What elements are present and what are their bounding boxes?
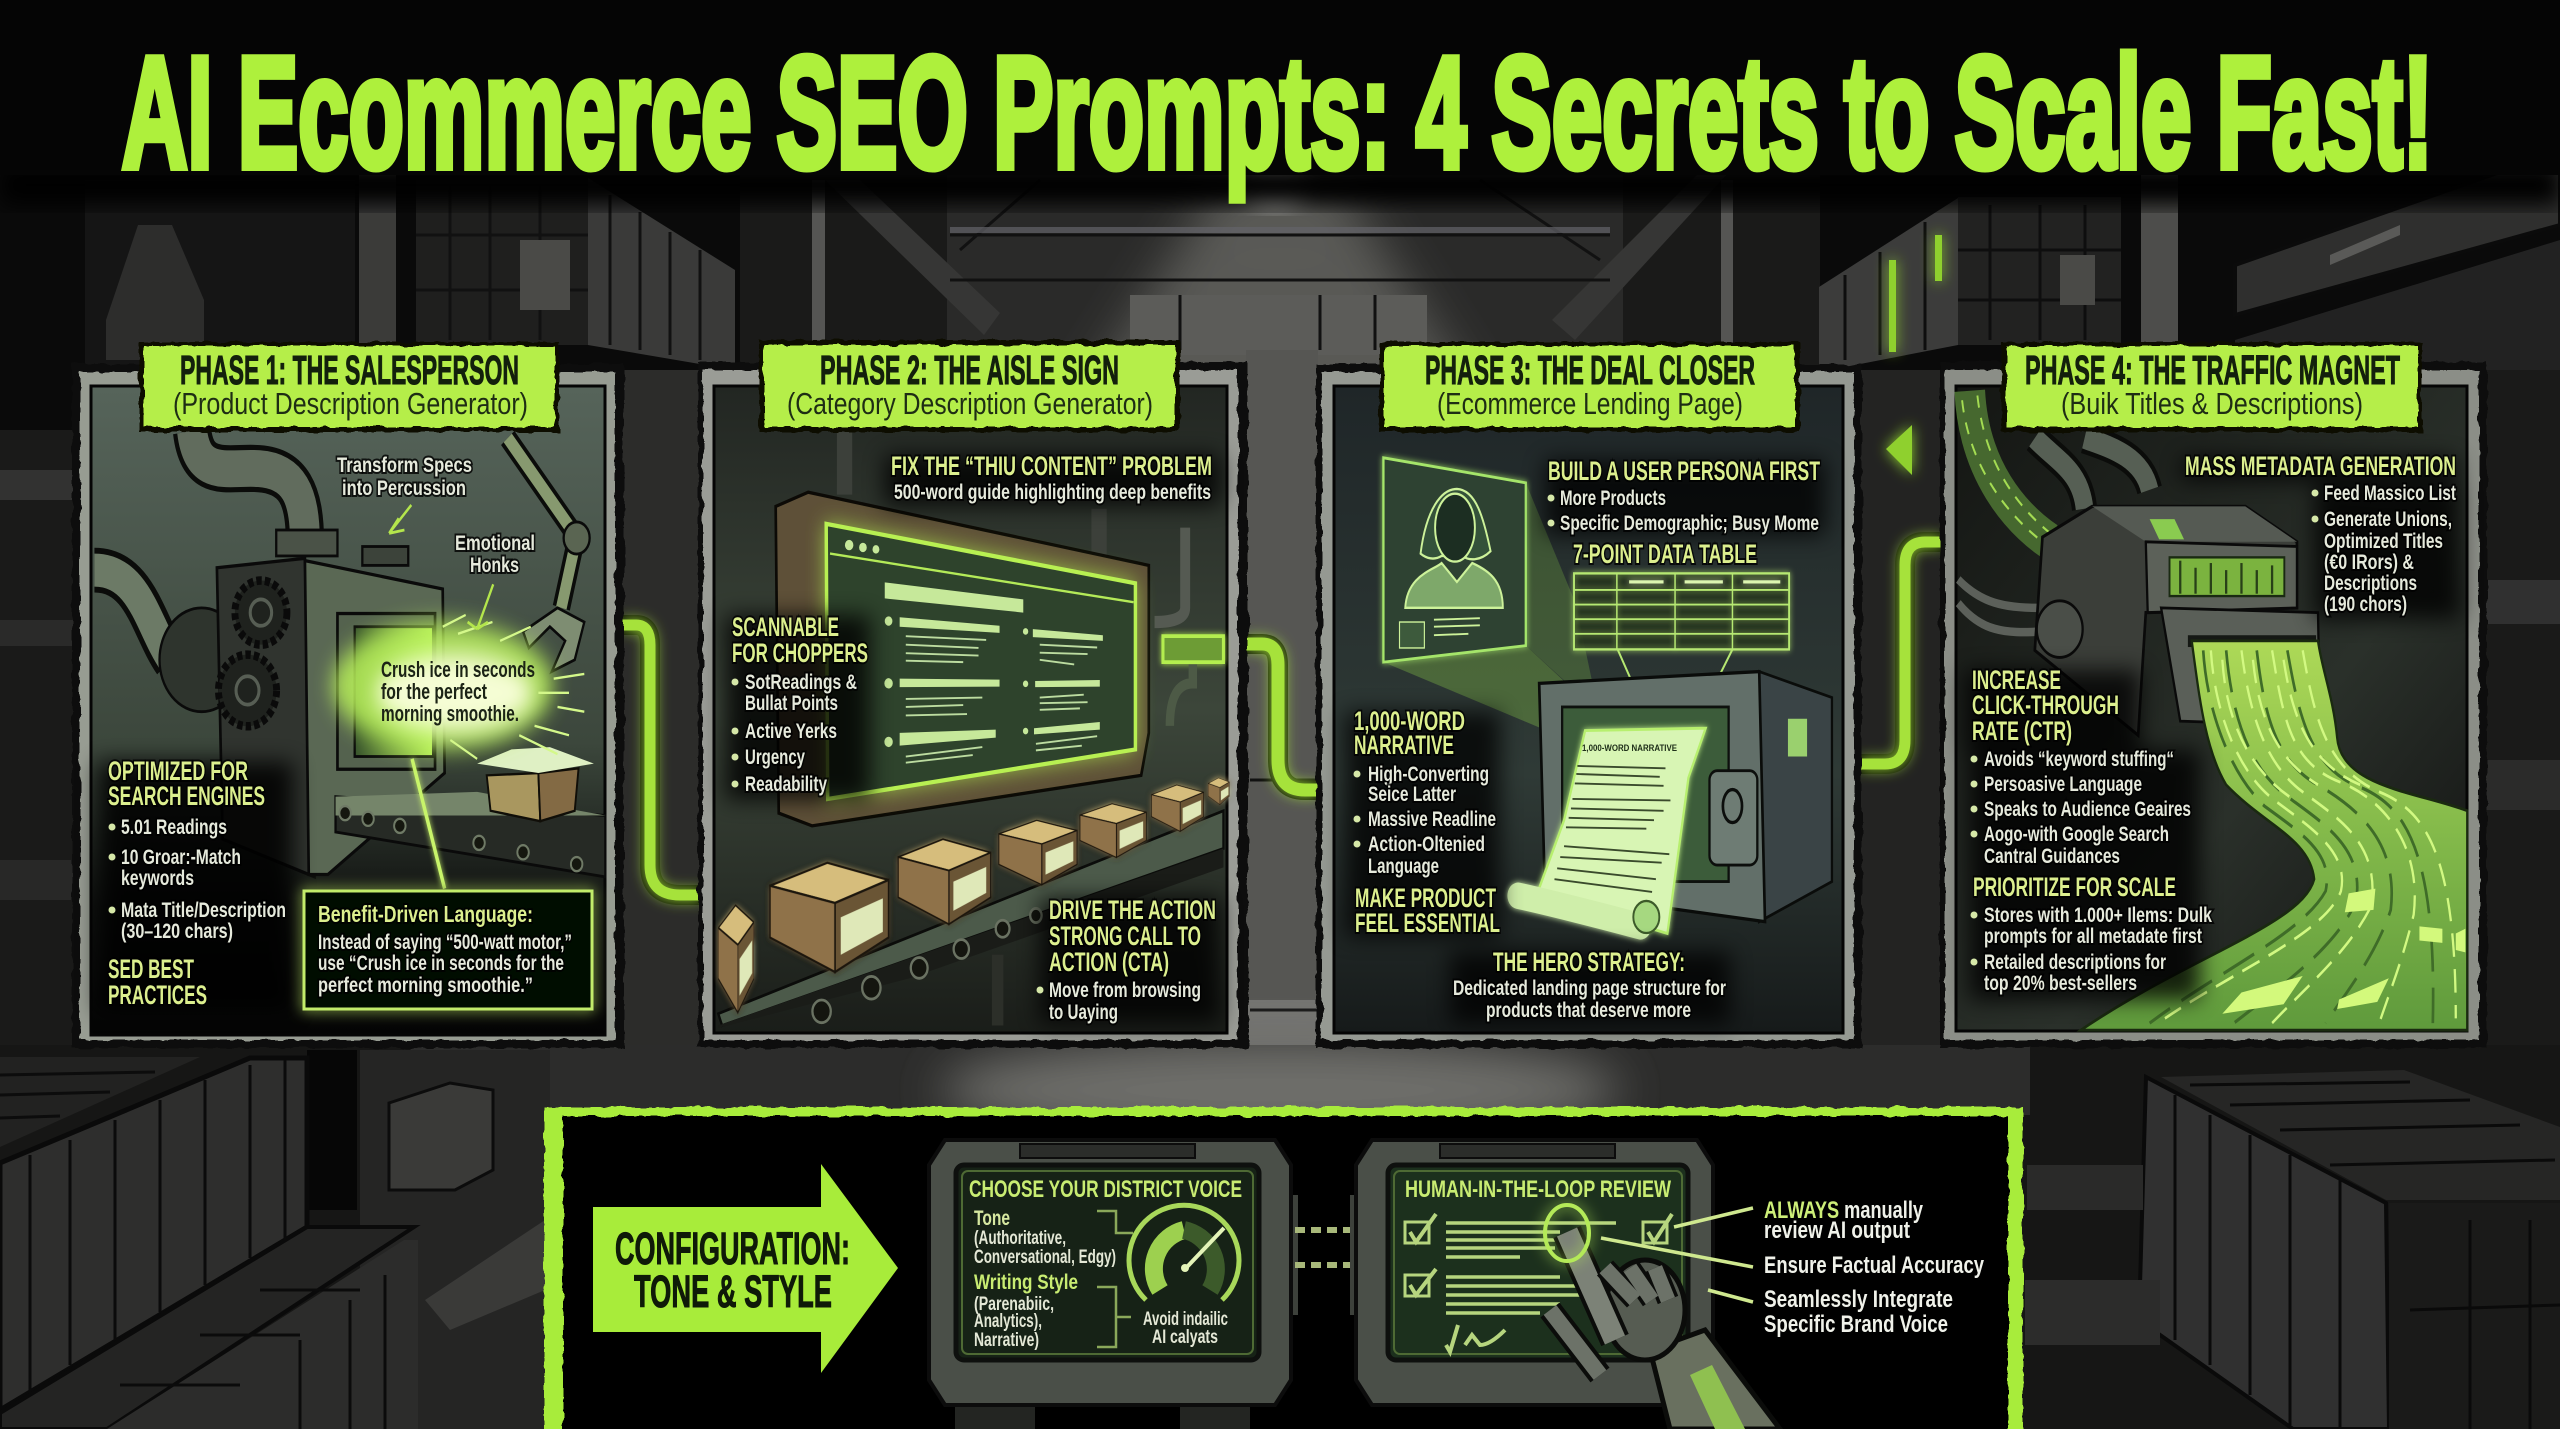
- text: mass metadata generation: [2185, 451, 2456, 616]
- header: phase 2: [759, 340, 1180, 432]
- text: increase click-through rate: CLICK-THROUGH: [1972, 690, 2119, 720]
- text: increase click-through rate: Aogo-with Google Search: [1984, 823, 2169, 846]
- text: transform specs: into Percussion: [342, 477, 466, 500]
- bracket lines: [1097, 1211, 1133, 1347]
- text: scannable for choppers: Active Yerks: [745, 720, 837, 743]
- panel: phase 4: [1940, 342, 2487, 1048]
- text: fix the thin content problem: FIX THE “THIU CONTENT” PROBLEM: [891, 451, 1212, 481]
- panel: phase 3: [1316, 342, 1862, 1048]
- illustration: metadata machine and data stream: [1958, 391, 2467, 1030]
- text: mass metadata generation: Generate Unions,: [2324, 508, 2452, 531]
- header: phase 1: (Product Description Generator): [173, 386, 528, 421]
- scroll caption: 1,000-WORD NARRATIVE: [1582, 743, 1677, 753]
- callout: benefit-driven language: use “Crush ice in seconds for the: [318, 952, 564, 975]
- bottom left containers: [0, 1057, 418, 1429]
- text: prioritize for scale: Retailed descriptions for: [1984, 951, 2166, 974]
- text: scannable for choppers: FOR CHOPPERS: [732, 638, 868, 668]
- leader lines: [1601, 1208, 1753, 1302]
- text: 1000-word narrative: NARRATIVE: [1354, 730, 1454, 760]
- text: optimized for search engines: keywords: [121, 867, 194, 890]
- text: prioritize for scale: PRIORITIZE FOR SCALE: [1973, 872, 2176, 902]
- floor: [0, 1038, 2560, 1429]
- configuration border: [544, 1107, 2023, 1429]
- text: 1000-word narrative: Language: [1368, 855, 1439, 878]
- text: sed best practices: SED BEST: [108, 954, 194, 984]
- left side walls: [0, 175, 396, 1100]
- text: build a user persona: Specific Demographic; Busy Mome: [1560, 512, 1819, 535]
- halo: text backdrop: [725, 455, 1220, 1023]
- text: prioritize for scale: [1970, 872, 2212, 995]
- text: writing style: Writing Style: [974, 1271, 1078, 1294]
- fade from top black band: [0, 165, 2560, 205]
- illustration: salesperson machine: [94, 431, 605, 889]
- text: sed best practices: [108, 954, 207, 1010]
- text: choose your district voice: CHOOSE YOUR DISTRICT VOICE: [969, 1176, 1242, 1203]
- text: optimized for search engines: Mata Title/Description: [121, 899, 286, 922]
- callout: benefit-driven language: Instead of saying “500-watt motor,”: [318, 931, 572, 954]
- text: fix the thin content problem: [891, 451, 1212, 504]
- text: hero strategy: [1453, 947, 1726, 1022]
- header: phase 1: [139, 342, 559, 432]
- text: emotional honks: [455, 532, 535, 577]
- gauge: [1129, 1205, 1239, 1300]
- text: crush ice: morning smoothie.: [381, 701, 519, 726]
- callout: benefit-driven language: Benefit-Driven Language:: [318, 901, 533, 927]
- text: avoid indailic: AI calyats: [1152, 1327, 1218, 1348]
- arrow: configuration tone and style: CONFIGURATION:: [615, 1223, 850, 1274]
- callout: benefit-driven language: perfect morning smoothie.”: [318, 974, 533, 997]
- text: crush ice: Crush ice in seconds: [381, 657, 535, 682]
- text: increase click-through rate: [1970, 665, 2191, 868]
- header: phase 3: [1379, 342, 1800, 432]
- neon on right container: [1886, 235, 1942, 475]
- monitor: choose voice: [929, 1140, 1298, 1429]
- monitor: human review: [1350, 1140, 1780, 1429]
- text: mass metadata generation: Descriptions: [2324, 572, 2417, 595]
- text: scannable for choppers: SotReadings &: [745, 671, 857, 694]
- robot hand: [1545, 1205, 1780, 1429]
- panel frame 1: [72, 364, 624, 1048]
- text: increase click-through rate: INCREASE: [1972, 665, 2061, 695]
- text: mass metadata generation: Feed Massico List: [2324, 482, 2456, 505]
- text: hero strategy: THE HERO STRATEGY:: [1493, 947, 1685, 977]
- crate on floor: [389, 1083, 493, 1190]
- text: 1000-word narrative: Seice Latter: [1368, 783, 1456, 806]
- text: increase click-through rate: Speaks to Audience Geaires: [1984, 798, 2191, 821]
- text: scannable for choppers: SCANNABLE: [732, 612, 839, 642]
- text: optimized for search engines: 10 Groar:-Match: [121, 846, 241, 869]
- header: phase 2: (Category Description Generator): [787, 386, 1153, 421]
- text: 1000-word narrative: High-Converting: [1368, 763, 1489, 786]
- halo: text backdrop: [1965, 458, 2460, 1000]
- pipe on right wall: [2235, 172, 2560, 370]
- cable between monitors: [1295, 1230, 1350, 1265]
- text: 1000-word narrative: Massive Readline: [1368, 808, 1496, 831]
- text: drive the action: to Uaying: [1049, 1001, 1118, 1024]
- left upper container: [416, 178, 735, 370]
- panel frame 4: [1940, 362, 2487, 1048]
- header: phase 4: (Buik Titles & Descriptions): [2061, 386, 2363, 421]
- text: drive the action: ACTION (CTA): [1049, 947, 1169, 977]
- text: prioritize for scale: prompts for all metadate first: [1984, 925, 2202, 948]
- text: drive the action: DRIVE THE ACTION: [1049, 895, 1216, 925]
- header: phase 2: PHASE 2: THE AISLE SIGN: [820, 347, 1119, 393]
- text: hero strategy: products that deserve more: [1486, 999, 1691, 1022]
- halo: text backdrop: [98, 762, 293, 1012]
- right upper container: [1819, 172, 2178, 372]
- illustration: persona, table and safe: [1383, 458, 1832, 933]
- text: make product feel essential: [1355, 883, 1500, 938]
- text: always review: review AI output: [1764, 1217, 1910, 1244]
- center wall and light: [740, 163, 1820, 1110]
- bottom right container: [2025, 1070, 2560, 1429]
- arrow: configuration tone and style: [593, 1164, 898, 1373]
- halo: text backdrop: [1345, 460, 1825, 1024]
- header: phase 4: [2001, 342, 2422, 432]
- text: mass metadata generation: (190 chors): [2324, 593, 2407, 616]
- text: mass metadata generation: (€0 IRors) &: [2324, 551, 2414, 574]
- gap walls between panels: [620, 370, 2560, 1110]
- header: phase 3: PHASE 3: THE DEAL CLOSER: [1425, 347, 1755, 393]
- connector pipes between panels: [622, 542, 1942, 895]
- text: emotional honks: Honks: [470, 554, 519, 577]
- text: mass metadata generation: Optimized Titles: [2324, 530, 2443, 553]
- text: writing style: (Parenabiic,: [974, 1294, 1054, 1315]
- text: writing style: Analytics),: [974, 1311, 1042, 1332]
- header: phase 3: (Ecommerce Lending Page): [1437, 386, 1743, 421]
- text: optimized for search engines: [108, 756, 286, 943]
- panel frame 2: [698, 362, 1248, 1048]
- checklist: [1405, 1214, 1672, 1352]
- text: crush ice: [381, 657, 535, 726]
- arrow: configuration tone and style: TONE & STYLE: [634, 1266, 832, 1317]
- text: emotional honks: Emotional: [455, 532, 535, 555]
- text: increase click-through rate: Avoids “keyword stuffing“: [1984, 748, 2174, 771]
- text: fix the thin content problem: 500-word guide highlighting deep benefits: [894, 481, 1211, 504]
- text: increase click-through rate: Cantral Guidances: [1984, 845, 2120, 868]
- text: make product feel essential: FEEL ESSENTIAL: [1355, 908, 1500, 938]
- panel: configuration: [544, 1107, 2023, 1429]
- text: scannable for choppers: Bullat Points: [745, 692, 838, 715]
- text: build a user persona: BUILD A USER PERSONA FIRST: [1548, 456, 1820, 486]
- text: transform specs: Transform Specs: [337, 454, 472, 477]
- text: drive the action: STRONG CALL TO: [1049, 921, 1201, 951]
- text: prioritize for scale: top 20% best-sellers: [1984, 972, 2137, 995]
- text: tone: [974, 1207, 1116, 1268]
- text: increase click-through rate: RATE (CTR): [1972, 716, 2072, 746]
- text: human in the loop review: HUMAN-IN-THE-LOOP REVIEW: [1405, 1176, 1671, 1203]
- text: crush ice: for the perfect: [381, 679, 487, 704]
- text: optimized for search engines: SEARCH ENGINES: [108, 781, 265, 811]
- text: tone: (Authoritative,: [974, 1228, 1066, 1249]
- text: scannable for choppers: [732, 612, 868, 796]
- panel frame 3: [1316, 364, 1862, 1048]
- callout: benefit-driven language: [304, 891, 592, 1009]
- text: drive the action: [1036, 895, 1216, 1024]
- header: phase 1: PHASE 1: THE SALESPERSON: [180, 347, 519, 393]
- text: 1000-word narrative: Action-Oltenied: [1368, 833, 1485, 856]
- text: sed best practices: PRACTICES: [108, 980, 207, 1010]
- text: make product feel essential: MAKE PRODUCT: [1355, 883, 1496, 913]
- text: 1000-word narrative: 1,000-WORD: [1354, 706, 1465, 736]
- text: optimized for search engines: (30–120 chars): [121, 920, 233, 943]
- text: hero strategy: Dedicated landing page structure for: [1453, 977, 1726, 1000]
- text: writing style: [974, 1271, 1078, 1351]
- text: transform specs: [337, 454, 472, 500]
- text: always review: [1764, 1197, 1923, 1244]
- text: brand voice: Seamlessly Integrate: [1764, 1286, 1953, 1313]
- text: increase click-through rate: Persoasive Language: [1984, 773, 2142, 796]
- text: optimized for search engines: OPTIMIZED FOR: [108, 756, 248, 786]
- text: avoid indailic: [1143, 1309, 1228, 1348]
- text: factual accuracy: Ensure Factual Accuracy: [1764, 1252, 1984, 1279]
- text: drive the action: Move from browsing: [1049, 979, 1201, 1002]
- text: scannable for choppers: Urgency: [745, 746, 805, 769]
- text: writing style: Narrative): [974, 1330, 1039, 1351]
- text: brand voice: Specific Brand Voice: [1764, 1311, 1948, 1338]
- illustration: aisle sign and conveyor: [718, 429, 1229, 1028]
- panel: phase 1: [72, 342, 624, 1048]
- text: 7-point data table: 7-POINT DATA TABLE: [1573, 539, 1757, 569]
- text: build a user persona: [1548, 456, 1820, 535]
- text: brand voice: [1764, 1286, 1953, 1338]
- text: 1000-word narrative: [1354, 706, 1496, 878]
- text: avoid indailic: Avoid indailic: [1143, 1309, 1228, 1330]
- text: prioritize for scale: Stores with 1.000+ Ilems: Dulk: [1984, 904, 2212, 927]
- text: build a user persona: More Products: [1560, 487, 1666, 510]
- text: tone: Tone: [974, 1207, 1010, 1230]
- text: always review: ALWAYS manually: [1764, 1197, 1923, 1224]
- text: optimized for search engines: 5.01 Readings: [121, 816, 227, 839]
- panel: phase 2: [698, 340, 1248, 1048]
- text: scannable for choppers: Readability: [745, 773, 827, 796]
- text: tone: Conversational, Edgy): [974, 1247, 1116, 1268]
